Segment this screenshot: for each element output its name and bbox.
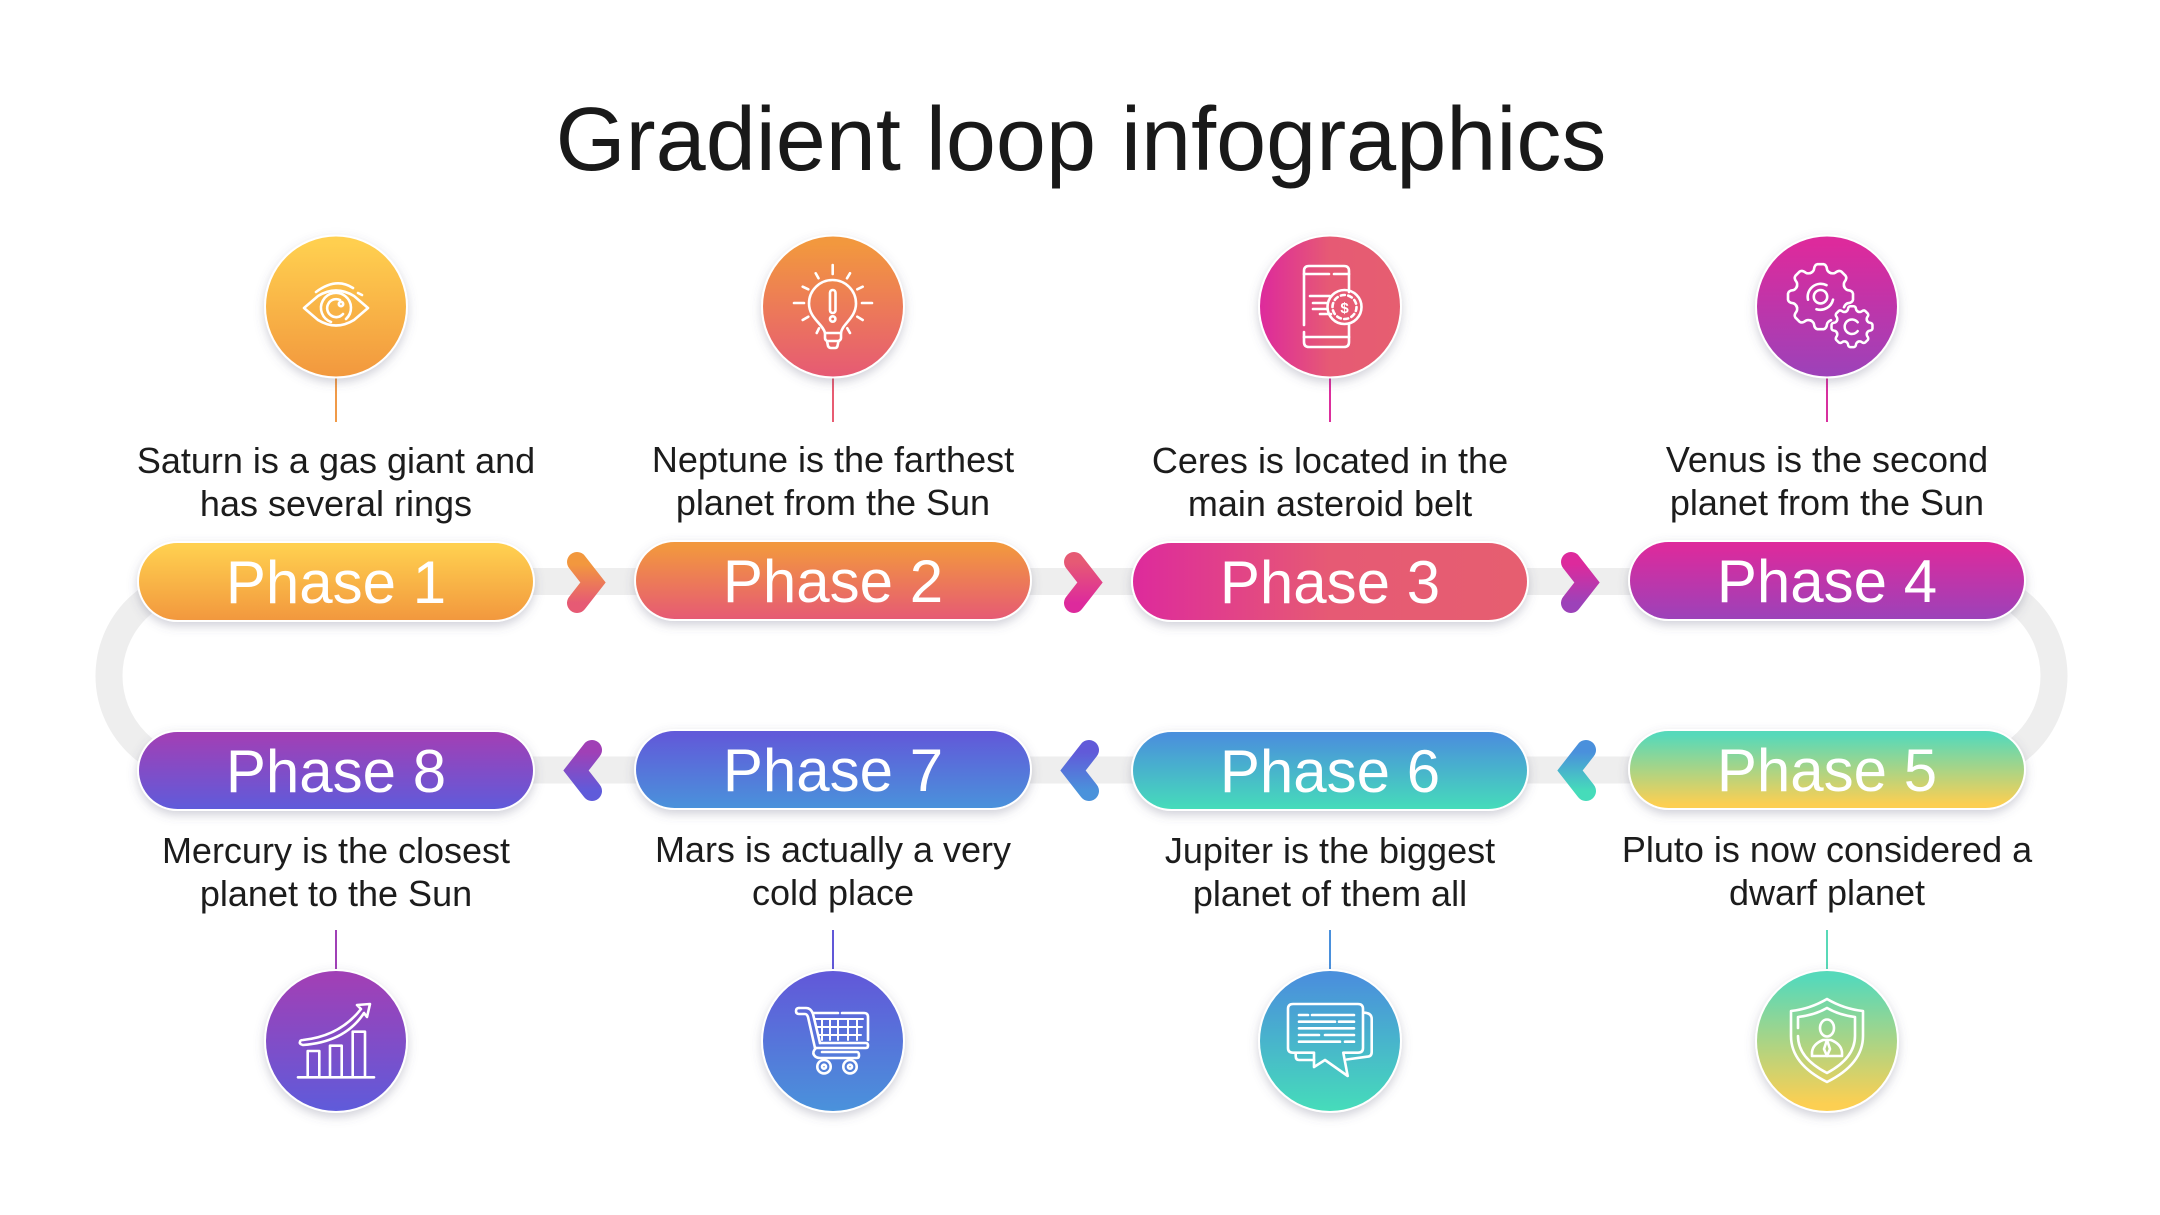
description: cold place: [752, 872, 914, 913]
arrow: phase 1 to 2: [577, 562, 593, 603]
icon disc: [264, 969, 408, 1113]
description: Jupiter is the biggest: [1165, 830, 1495, 871]
arrow: phase 6 to 7: [1073, 750, 1089, 791]
description: Saturn is a gas giant and: [137, 440, 535, 481]
arrow: phase 5 to 6: [1570, 750, 1586, 791]
pill: [1628, 729, 2026, 810]
arrow: phase 2 to 3: [1074, 562, 1090, 603]
description: main asteroid belt: [1188, 483, 1472, 524]
loop track: [109, 582, 2054, 770]
icon: eye: [304, 283, 368, 326]
pill: [137, 730, 535, 811]
icon: chat bubbles: [1288, 1004, 1372, 1076]
connector line: [1329, 930, 1331, 972]
description: Ceres is located in the: [1152, 440, 1508, 481]
panel: phase 1: [137, 234, 535, 622]
description: planet from the Sun: [676, 482, 990, 523]
connector line: [832, 376, 834, 422]
arrow: phase 3 to 4: [1571, 562, 1587, 603]
description: Venus is the second: [1666, 439, 1988, 480]
icon disc: [264, 234, 408, 378]
pill: [1628, 540, 2026, 621]
pill: Phase 7: [723, 737, 943, 804]
description: planet from the Sun: [1670, 482, 1984, 523]
panel: phase 8: [137, 730, 535, 1113]
icon disc: [1258, 969, 1402, 1113]
icon: shopping cart: [796, 1008, 868, 1073]
icon: growth chart: [298, 1004, 374, 1077]
pill: Phase 8: [226, 738, 446, 805]
description: Neptune is the farthest: [652, 439, 1014, 480]
pill: [634, 540, 1032, 621]
panel: phase 5: [1622, 729, 2033, 1113]
icon: phone with coin: [1304, 266, 1362, 347]
connector line: [335, 376, 337, 422]
icon disc: [761, 969, 905, 1113]
arrow: phase 7 to 8: [576, 750, 592, 791]
description: has several rings: [200, 483, 472, 524]
description: dwarf planet: [1729, 872, 1925, 913]
icon: shield with person: [1791, 999, 1863, 1082]
pill: [1131, 541, 1529, 622]
pill: [1131, 730, 1529, 811]
connector line: [1826, 930, 1828, 972]
panel: phase 4: [1628, 234, 2026, 621]
description: Mars is actually a very: [655, 829, 1011, 870]
pill: Phase 2: [723, 548, 943, 615]
icon: light bulb: [794, 265, 872, 348]
description: planet to the Sun: [200, 873, 472, 914]
panel: phase 7: [634, 729, 1032, 1113]
pill: Phase 3: [1220, 549, 1440, 616]
pill: Phase 4: [1717, 548, 1937, 615]
pill: Phase 5: [1717, 737, 1937, 804]
icon disc: [1755, 969, 1899, 1113]
connector line: [832, 930, 834, 972]
description: planet of them all: [1193, 873, 1467, 914]
description: Mercury is the closest: [162, 830, 510, 871]
pill: Phase 6: [1220, 738, 1440, 805]
icon disc: [1258, 234, 1402, 378]
icon disc: [761, 234, 905, 378]
title: Gradient loop infographics: [556, 90, 1606, 190]
icon: gears: [1788, 264, 1872, 347]
panel: phase 2: [634, 234, 1032, 621]
connector line: [1329, 376, 1331, 422]
panel: phase 6: [1131, 730, 1529, 1113]
pill: [137, 541, 535, 622]
panel: phase 3: [1131, 234, 1529, 622]
description: Pluto is now considered a: [1622, 829, 2033, 870]
connector line: [1826, 376, 1828, 422]
connector line: [335, 930, 337, 972]
icon: phone with coin: $: [1340, 300, 1349, 317]
pill: Phase 1: [226, 549, 446, 616]
icon disc: [1755, 234, 1899, 378]
pill: [634, 729, 1032, 810]
